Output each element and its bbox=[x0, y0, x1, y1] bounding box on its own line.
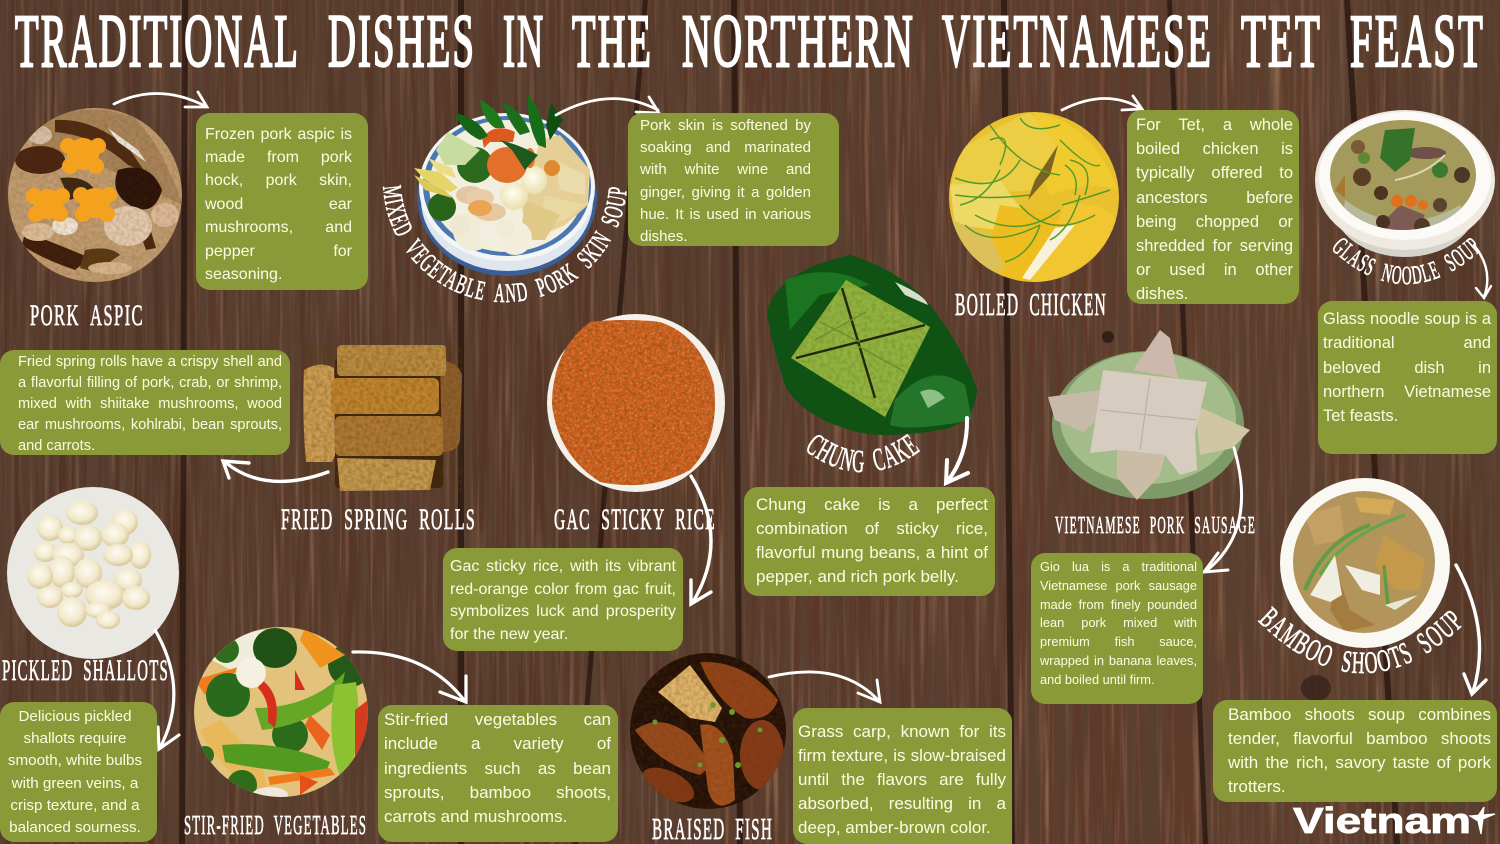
text box: chung cake: combination of sticky rice, bbox=[756, 519, 988, 538]
arrow: gac rice to text bbox=[691, 476, 711, 604]
dish: pickled shallots bbox=[7, 487, 179, 659]
dish: gac sticky rice bbox=[547, 314, 725, 492]
title bbox=[15, 0, 1485, 83]
text box: bamboo shoots soup: trotters. bbox=[1228, 777, 1286, 796]
text box: boiled chicken: or used in other bbox=[1136, 261, 1293, 279]
title: NORTHERN bbox=[682, 0, 915, 83]
text box: pork aspic: seasoning. bbox=[205, 266, 282, 283]
text box: boiled chicken bbox=[1127, 110, 1299, 304]
text box: pork aspic: hock, pork skin, bbox=[205, 172, 352, 189]
label: bamboo shoots soup: BAMBOO SHOOTS SOUP bbox=[1258, 606, 1462, 674]
text box: chung cake: pepper, and rich pork belly. bbox=[756, 567, 959, 586]
text box: Vietnamese pork sausage: and boiled until firm. bbox=[1040, 672, 1155, 687]
text box: boiled chicken: being chopped or bbox=[1136, 213, 1293, 231]
text box: pork aspic: made from pork bbox=[205, 149, 352, 166]
text box: pork aspic: mushrooms, and bbox=[205, 219, 352, 236]
label: chung cake: CHUNG CAKE bbox=[807, 434, 920, 472]
label: pork aspic: PORK ASPIC bbox=[30, 299, 144, 332]
title: IN bbox=[503, 0, 545, 83]
dish: fried spring rolls bbox=[303, 345, 462, 492]
text box: stir-fried vegetables: include a variety of bbox=[384, 734, 611, 753]
text box: mixed vegetable soup: soaking and marinated bbox=[640, 139, 811, 156]
text box: glass noodle soup bbox=[1318, 301, 1497, 454]
text: VIETNAMESE PORK SAUSAGE bbox=[1055, 513, 1256, 539]
text box: stir-fried vegetables: sprouts, bamboo shoots, bbox=[384, 783, 611, 802]
text box: gac sticky rice: symbolizes luck and prosperity bbox=[450, 603, 676, 620]
arrow: bamboo shoots soup to text bbox=[1456, 565, 1486, 694]
dish: pork aspic bbox=[8, 108, 182, 282]
text box: braised fish bbox=[793, 708, 1012, 844]
text box: mixed vegetable soup bbox=[628, 113, 839, 246]
text box: pork aspic: wood ear bbox=[205, 196, 352, 213]
dish: Vietnamese pork sausage bbox=[1048, 330, 1250, 500]
text box: braised fish: absorbed, resulting in a bbox=[798, 794, 1006, 813]
text box: chung cake: flavorful mung beans, a hint of bbox=[756, 543, 988, 562]
text box: glass noodle soup: northern Vietnamese bbox=[1323, 383, 1491, 401]
text box: Vietnamese pork sausage: premium fish sauce, bbox=[1040, 634, 1197, 649]
text box: pickled shallots: smooth, white bulbs bbox=[8, 752, 142, 769]
text box: mixed vegetable soup: ginger, giving it a golden bbox=[640, 184, 811, 201]
text box: glass noodle soup: Tet feasts. bbox=[1323, 407, 1398, 425]
text box: Vietnamese pork sausage: Vietnamese pork sausage bbox=[1040, 578, 1197, 593]
arrow: spring rolls to text bbox=[223, 461, 328, 481]
dish: glass noodle soup bbox=[1315, 110, 1495, 257]
text box: pickled shallots: balanced sourness. bbox=[9, 819, 141, 836]
text box: glass noodle soup: beloved dish in bbox=[1323, 359, 1491, 377]
dish: braised fish bbox=[630, 653, 786, 810]
text box: braised fish: until the flavors are fully bbox=[798, 770, 1006, 789]
text box: pickled shallots: Delicious pickled bbox=[18, 708, 132, 725]
text: PICKLED SHALLOTS bbox=[2, 654, 169, 687]
text box: bamboo shoots soup bbox=[1213, 700, 1497, 802]
label: glass noodle soup: GLASS NOODLE SOUP bbox=[1333, 238, 1480, 285]
text box: pickled shallots: shallots require bbox=[24, 730, 126, 747]
text box: stir-fried vegetables: Stir-fried vegetables can bbox=[384, 710, 611, 729]
text box: chung cake bbox=[744, 487, 995, 596]
text box: glass noodle soup: traditional and bbox=[1323, 334, 1491, 352]
text box: pork aspic: pepper for bbox=[205, 243, 352, 260]
text box: boiled chicken: ancestors before bbox=[1136, 189, 1293, 207]
text box: Vietnamese pork sausage: made from finely pounded bbox=[1040, 597, 1197, 612]
text box: boiled chicken: For Tet, a whole bbox=[1136, 116, 1293, 134]
text box: pork aspic: Frozen pork aspic is bbox=[205, 126, 352, 142]
text box: Vietnamese pork sausage: wrapped in banana leaves, bbox=[1040, 653, 1197, 668]
text box: braised fish: Grass carp, known for its bbox=[798, 722, 1006, 741]
text box: fried spring rolls: mixed with shiitake mushrooms, wood bbox=[18, 396, 282, 412]
text box: mixed vegetable soup: dishes. bbox=[640, 228, 688, 245]
arrow: mixed soup to text bbox=[556, 97, 659, 115]
text box: gac sticky rice: Gac sticky rice, with its vibrant bbox=[450, 558, 676, 575]
text box: pickled shallots: crisp texture, and a bbox=[10, 797, 140, 814]
text box: gac sticky rice: for the new year. bbox=[450, 626, 568, 643]
title: TRADITIONAL bbox=[15, 0, 300, 83]
arrow: pork aspic to text bbox=[114, 92, 207, 107]
dish: stir-fried vegetables bbox=[194, 627, 372, 803]
text box: bamboo shoots soup: Bamboo shoots soup combines bbox=[1228, 705, 1491, 724]
text box: stir-fried vegetables: ingredients such as bean bbox=[384, 759, 611, 778]
logo: Vietnam+ bbox=[1293, 800, 1495, 841]
arrow: braised fish to text bbox=[769, 672, 880, 702]
text box: stir-fried vegetables: carrots and mushrooms. bbox=[384, 807, 567, 826]
text box: fried spring rolls: ear mushrooms, kohlrabi, bean sprouts, bbox=[18, 417, 282, 433]
text box: Vietnamese pork sausage bbox=[1031, 553, 1203, 704]
arrow: glass noodle soup to text bbox=[1474, 245, 1491, 298]
text box: bamboo shoots soup: tender, flavorful bamboo shoots bbox=[1228, 729, 1491, 748]
text box: mixed vegetable soup: with white wine and bbox=[640, 161, 811, 178]
dish: boiled chicken bbox=[949, 112, 1119, 285]
text box: mixed vegetable soup: Pork skin is softened by bbox=[640, 117, 811, 134]
arrow: chung cake to text bbox=[946, 418, 968, 483]
title: DISHES bbox=[328, 0, 476, 83]
text box: chung cake: Chung cake is a perfect bbox=[756, 495, 988, 514]
title: VIETNAMESE bbox=[942, 0, 1213, 83]
text box: fried spring rolls: a flavorful filling of pork, crab, or shrimp, bbox=[18, 375, 282, 391]
label: mixed vegetable and pork skin soup: MIXED VEGETABLE AND PORK SKIN SOUP bbox=[382, 184, 627, 302]
text box: bamboo shoots soup: with the rich, savory taste of pork bbox=[1228, 753, 1491, 772]
arrow: stir-fried vegetables to text bbox=[353, 652, 466, 702]
text box: mixed vegetable soup: hue. It is used in various bbox=[640, 206, 811, 223]
arrow: boiled chicken to text bbox=[1062, 96, 1142, 110]
dish: bamboo shoots soup bbox=[1280, 478, 1450, 648]
text box: fried spring rolls: Fried spring rolls have a crispy shell and bbox=[18, 354, 282, 370]
text box: fried spring rolls bbox=[0, 350, 290, 455]
text box: pickled shallots bbox=[0, 702, 157, 842]
text: STIR-FRIED VEGETABLES bbox=[184, 810, 367, 840]
dish: mixed vegetable and pork skin soup bowl bbox=[414, 95, 597, 276]
text: BOILED CHICKEN bbox=[955, 286, 1107, 322]
text box: boiled chicken: boiled chicken is bbox=[1136, 140, 1293, 158]
title: TET bbox=[1241, 0, 1322, 83]
dish: chung cake on banana leaf bbox=[767, 255, 977, 435]
text box: pork aspic bbox=[196, 113, 368, 290]
arrow: pickled shallots to text bbox=[155, 630, 179, 749]
text box: pickled shallots: with green veins, a bbox=[12, 775, 138, 792]
text box: fried spring rolls: and carrots. bbox=[18, 438, 95, 454]
label: fried spring rolls: FRIED SPRING ROLLS bbox=[281, 503, 476, 536]
text box: stir-fried vegetables bbox=[378, 705, 618, 842]
text box: boiled chicken: dishes. bbox=[1136, 285, 1188, 303]
text box: Vietnamese pork sausage: Gio lua is a traditional bbox=[1040, 559, 1197, 574]
arrow: sausage to text bbox=[1204, 448, 1242, 572]
title: THE bbox=[572, 0, 653, 83]
text box: gac sticky rice bbox=[443, 548, 683, 651]
logo: Vietnam+: Vietnam bbox=[1293, 800, 1471, 841]
text box: braised fish: firm texture, is slow-braised bbox=[798, 746, 1006, 765]
text box: boiled chicken: shredded for serving bbox=[1136, 237, 1293, 255]
label: gac sticky rice: GAC STICKY RICE bbox=[554, 503, 716, 536]
text box: Vietnamese pork sausage: lean pork mixed with bbox=[1040, 615, 1197, 630]
text box: boiled chicken: typically offered to bbox=[1136, 164, 1293, 182]
text box: braised fish: deep, amber-brown color. bbox=[798, 818, 991, 837]
text box: glass noodle soup: Glass noodle soup is a bbox=[1323, 310, 1491, 328]
text box: gac sticky rice: red-orange color from gac fruit, bbox=[450, 581, 676, 598]
